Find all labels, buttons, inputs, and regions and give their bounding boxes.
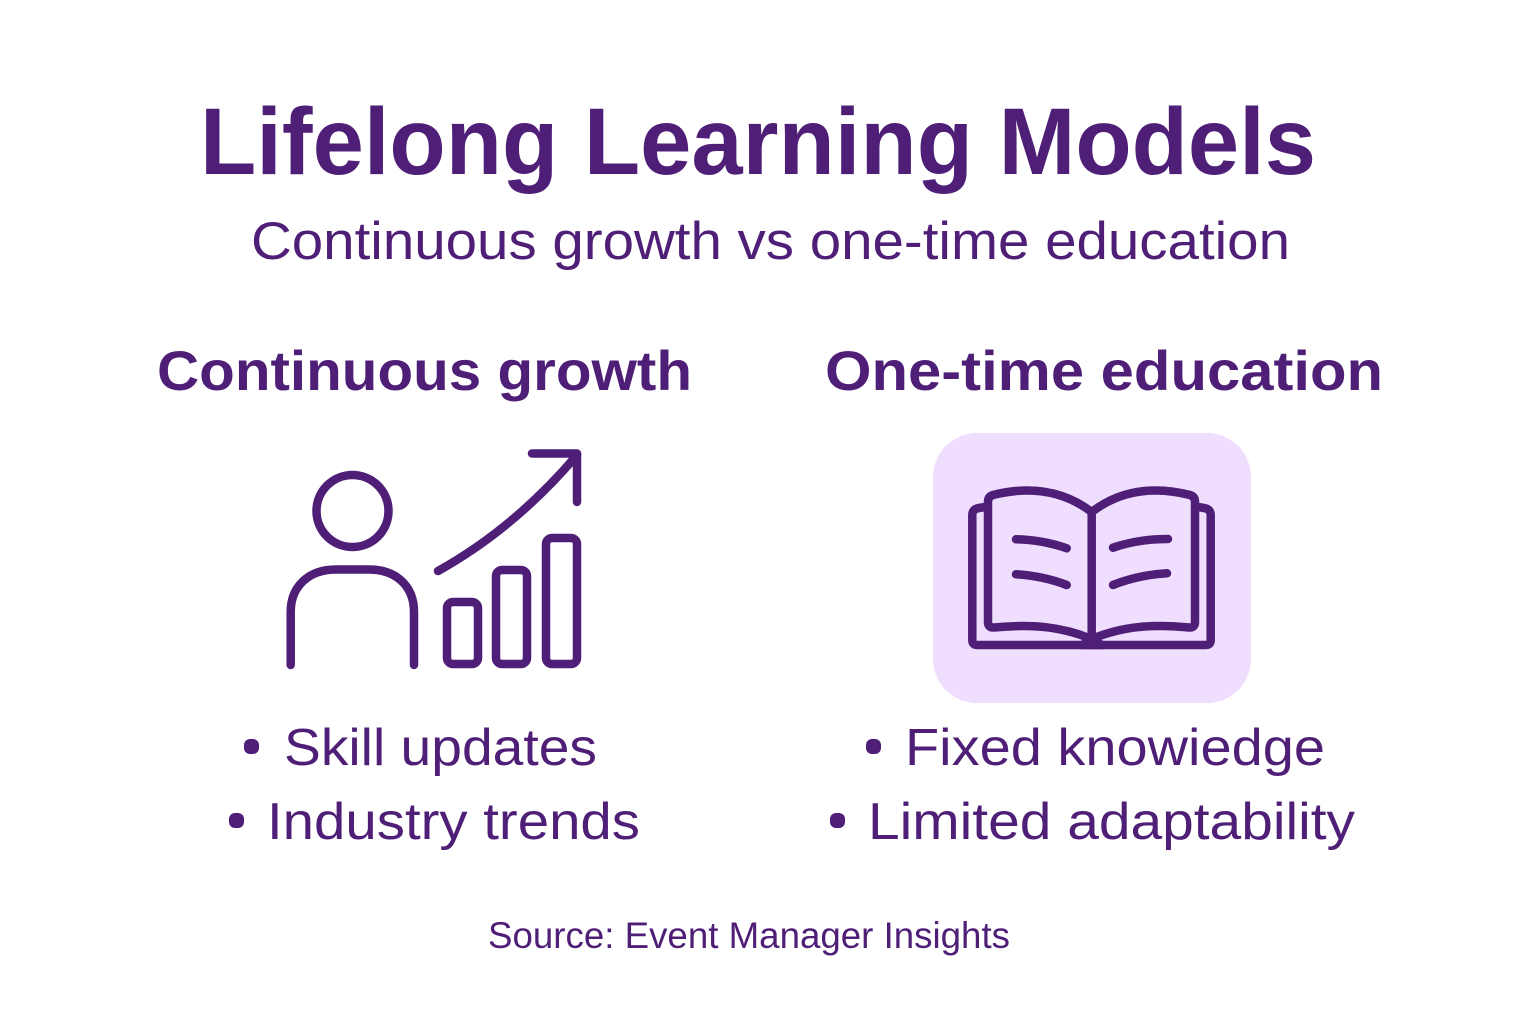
title: Lifelong Learning Models: [200, 89, 1316, 195]
icon: person: [291, 475, 414, 665]
icon: rising arrow: [438, 454, 577, 571]
icon: person with rising bar chart: [291, 454, 577, 665]
icon tile: [933, 433, 1251, 703]
bullet list: continuous growth: Industry trends: [267, 793, 640, 851]
icon: open book: [972, 491, 1211, 645]
bullet list: continuous growth: [229, 719, 640, 851]
heading: continuous growth: Continuous growth: [157, 339, 692, 402]
icon: open book on lilac tile: [933, 433, 1251, 703]
bullet list: continuous growth: Skill updates: [284, 719, 597, 777]
heading: one-time education: One-time education: [825, 339, 1383, 402]
panel: one-time education: [825, 339, 1383, 851]
bullet list: one-time education: Limited adaptability: [868, 793, 1355, 851]
bullet list: one-time education: Fixed knowiedge: [905, 719, 1325, 777]
icon: bars: [447, 538, 577, 664]
source note: Source: Event Manager Insights: [488, 915, 1010, 956]
subtitle: Continuous growth vs one-time education: [251, 212, 1290, 271]
bullet list: one-time education: [830, 719, 1355, 851]
panel: continuous growth: [157, 339, 692, 851]
